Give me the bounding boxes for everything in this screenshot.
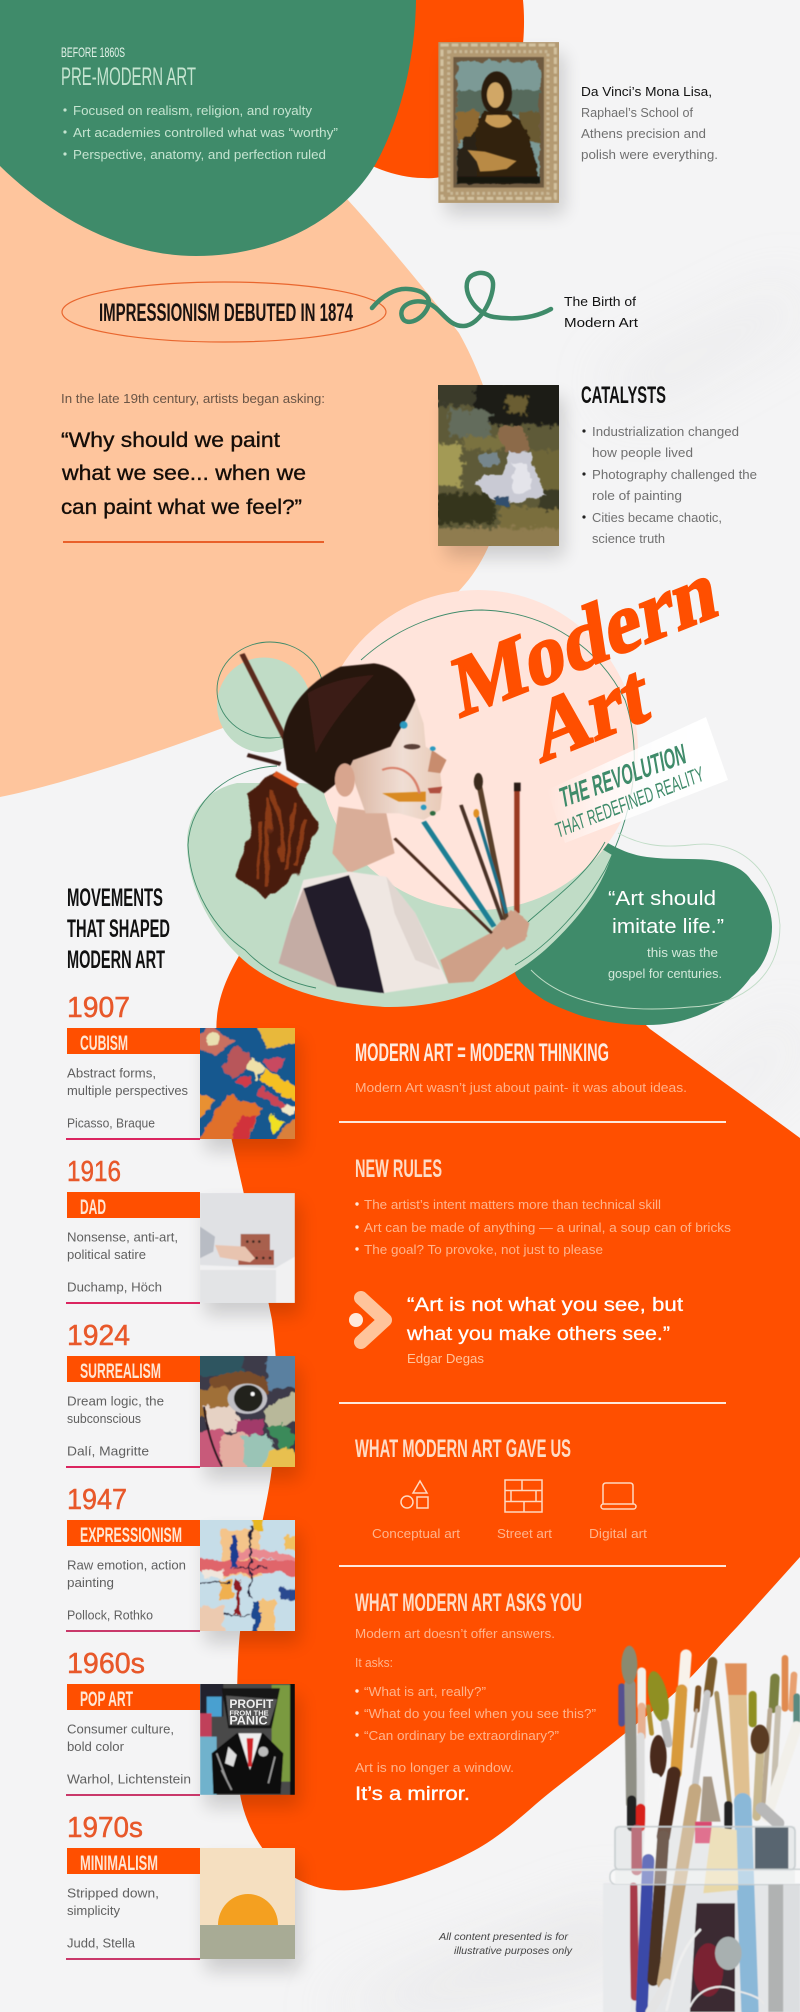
outline: quote blob	[531, 833, 780, 1009]
bullet list: catalysts: science truth	[592, 532, 665, 546]
quote: Edgar Degas: what you make others see.”	[406, 1323, 670, 1345]
timeline: 1907 cubism: multiple perspectives	[67, 1084, 188, 1098]
timeline: 1907 cubism: CUBISM	[80, 1032, 128, 1055]
text block: Da Vinci note: Raphael’s School of	[581, 106, 694, 120]
label: the birth of modern art	[564, 295, 639, 330]
callout: impressionism debuted in 1874	[62, 282, 386, 342]
label: the birth of modern art: Modern Art	[564, 316, 639, 330]
timeline: 1907 cubism: 1907	[67, 992, 130, 1024]
image: abstract expressionist painting	[200, 1520, 295, 1631]
body text: Art is no longer a window.	[355, 1761, 514, 1775]
icon: brick wall	[505, 1480, 542, 1512]
timeline: 1947 expressionism	[66, 1484, 300, 1643]
blob: big orange panel	[216, 940, 800, 1890]
timeline: 1916 dada: Duchamp, Höch	[67, 1280, 162, 1294]
body text: Modern art doesn’t offer answers.	[355, 1627, 555, 1641]
timeline: 1970s minimalism: 1970s	[67, 1812, 143, 1844]
body text: “What is art, really?”	[364, 1685, 486, 1699]
quote: why should we paint: what we see... when we	[61, 462, 306, 485]
panel: modern art = modern thinking	[355, 1039, 687, 1095]
blob: peach	[0, 160, 504, 797]
title: Modern Art: Art	[528, 643, 654, 782]
quote: art should imitate life: imitate life.”	[612, 916, 724, 938]
text block: Da Vinci note	[581, 85, 718, 162]
panel: catalysts	[581, 382, 757, 546]
bullet list: catalysts: role of painting	[592, 489, 682, 503]
blob: mint small	[217, 658, 311, 752]
paper shading	[320, 280, 800, 2012]
footnote: illustrative purposes only	[454, 1945, 573, 1957]
bullet list: catalysts: how people lived	[592, 446, 693, 460]
outline curves	[188, 610, 634, 988]
image: jar of paintbrushes	[603, 1646, 800, 2012]
callout: impressionism debuted in 1874: IMPRESSIONISM DEBUTED IN 1874	[99, 299, 353, 327]
timeline: 1924 surrealism: 1924	[67, 1320, 130, 1352]
bullet list: catalysts: Cities became chaotic,	[592, 511, 722, 525]
timeline: 1924 surrealism: Dream logic, the	[67, 1394, 164, 1408]
timeline: 1960s pop art: 1960s	[67, 1648, 145, 1680]
panel: what modern art asks you: WHAT MODERN ART ASKS YOU	[355, 1589, 582, 1617]
icon: arrow with dot	[349, 1298, 385, 1342]
timeline: 1947 expressionism: Raw emotion, action	[67, 1558, 186, 1572]
panel: what modern art gave us: WHAT MODERN ART GAVE US	[355, 1435, 571, 1463]
timeline: 1970s minimalism: Stripped down,	[67, 1886, 159, 1900]
bullet list: new rules	[355, 1198, 731, 1257]
heading: movements that shaped modern art: THAT SHAPED	[67, 915, 170, 943]
blob: mint large	[187, 783, 612, 1007]
footnote	[438, 1931, 573, 1957]
title ribbon	[547, 717, 728, 843]
icon labels	[372, 1527, 648, 1541]
photo: woman with paintbrushes	[237, 654, 529, 993]
panel: what modern art asks you	[355, 1589, 596, 1805]
timeline: 1907 cubism: Picasso, Braque	[67, 1116, 155, 1130]
bullet list: new rules: Art can be made of anything — a urinal, a soup can of bricks	[364, 1221, 731, 1235]
timeline: 1924 surrealism: subconscious	[67, 1412, 141, 1426]
timeline: 1960s pop art	[66, 1648, 300, 1807]
timeline: 1960s pop art: POP ART	[80, 1688, 133, 1711]
bullet list: pre-modern traits: Focused on realism, religion, and royalty	[73, 104, 313, 118]
blob: pink circle	[318, 590, 638, 910]
timeline: 1970s minimalism: MINIMALISM	[80, 1852, 158, 1875]
timeline: 1916 dada: 1916	[67, 1156, 121, 1188]
quote: art should imitate life: gospel for centuries.	[608, 967, 722, 981]
panel: new rules: NEW RULES	[355, 1155, 442, 1183]
timeline: 1960s pop art: Warhol, Lichtenstein	[67, 1772, 191, 1786]
image: profit from the panic street art: FROM THE	[229, 1708, 269, 1717]
icon labels: Street art	[497, 1527, 553, 1541]
body text	[355, 1627, 596, 1775]
title: Modern Art: Modern	[448, 539, 722, 737]
bullet list: pre-modern traits	[63, 104, 338, 162]
panel: new rules	[355, 1155, 731, 1257]
squiggle arrow	[372, 273, 551, 326]
timeline: 1947 expressionism: painting	[67, 1576, 114, 1590]
quote: Edgar Degas: Edgar Degas	[407, 1352, 484, 1366]
timeline: 1916 dada: political satire	[67, 1248, 146, 1262]
icon labels: Digital art	[589, 1527, 648, 1541]
bullet list: catalysts: Industrialization changed	[592, 425, 739, 439]
punchline: it's a mirror: It’s a mirror.	[355, 1783, 470, 1805]
timeline: 1970s minimalism: Judd, Stella	[67, 1936, 135, 1950]
panel: pre-modern art	[61, 44, 338, 162]
image: framed Mona Lisa	[438, 42, 564, 214]
body text: “Can ordinary be extraordinary?”	[364, 1729, 559, 1743]
heading: catalysts: CATALYSTS	[581, 382, 666, 409]
timeline: 1970s minimalism	[66, 1812, 300, 1971]
timeline: 1960s pop art: Consumer culture,	[67, 1722, 174, 1736]
timeline: 1947 expressionism: EXPRESSIONISM	[80, 1524, 182, 1547]
timeline: 1907 cubism	[66, 992, 300, 1151]
bullet list: catalysts: Photography challenged the	[592, 468, 757, 482]
heading: movements that shaped modern art	[67, 884, 170, 974]
timeline: 1916 dada: Nonsense, anti-art,	[67, 1230, 178, 1244]
quote: Edgar Degas	[406, 1294, 684, 1366]
icon: laptop	[601, 1483, 636, 1509]
body text: “What do you feel when you see this?”	[364, 1707, 596, 1721]
heading: movements that shaped modern art: MOVEMENTS	[67, 884, 163, 912]
timeline: 1916 dada: DAD	[80, 1196, 106, 1219]
bullet list: new rules: The goal? To provoke, not just to please	[364, 1243, 603, 1257]
quote: art should imitate life: this was the	[647, 946, 718, 960]
bullet list: catalysts	[582, 425, 757, 546]
bullet list: pre-modern traits: Perspective, anatomy, and perfection ruled	[73, 148, 326, 162]
quote: art should imitate life	[608, 888, 724, 981]
heading: pre-modern art: PRE-MODERN ART	[61, 63, 196, 91]
image: impressionist painting of girl	[435, 382, 564, 557]
quote: art should imitate life: “Art should	[608, 888, 716, 910]
body text: It asks:	[355, 1656, 393, 1670]
text block: Da Vinci note: polish were everything.	[581, 148, 718, 162]
quote: why should we paint: can paint what we feel?”	[61, 496, 302, 519]
eyebrow: before 1860s: BEFORE 1860S	[61, 44, 125, 60]
label: the birth of modern art: The Birth of	[564, 295, 637, 309]
timeline: 1947 expressionism: Pollock, Rothko	[67, 1608, 153, 1622]
timeline: 1960s pop art: bold color	[67, 1740, 124, 1754]
timeline: 1970s minimalism: simplicity	[67, 1904, 121, 1918]
image: cubist painting	[200, 1028, 295, 1139]
timeline: 1947 expressionism: 1947	[67, 1484, 127, 1516]
bullet list: new rules: The artist’s intent matters more than technical skill	[364, 1198, 661, 1212]
image: minimalist sun	[200, 1848, 295, 1959]
text block: Da Vinci note: Athens precision and	[581, 127, 706, 141]
icon labels: Conceptual art	[372, 1527, 461, 1541]
underline	[63, 541, 324, 543]
timeline: 1924 surrealism: Dalí, Magritte	[67, 1444, 149, 1458]
blob: top orange	[370, 0, 524, 178]
panel: what modern art gave us	[355, 1435, 648, 1541]
intro line: In the late 19th century, artists began asking:	[61, 392, 325, 406]
footnote: All content presented is for	[438, 1931, 569, 1943]
quote: Edgar Degas: “Art is not what you see, but	[407, 1294, 684, 1316]
bullet list: pre-modern traits: Art academies controlled what was “worthy”	[73, 126, 338, 140]
quote: why should we paint: “Why should we paint	[61, 429, 280, 452]
image: bricks on plinth	[200, 1193, 295, 1303]
text block: Da Vinci note: Da Vinci’s Mona Lisa,	[581, 85, 712, 99]
quote: why should we paint	[61, 429, 306, 519]
timeline: 1916 dada	[66, 1156, 300, 1315]
icon: shapes	[401, 1481, 428, 1508]
image: profit from the panic street art: PANIC	[229, 1714, 268, 1728]
timeline: 1907 cubism: Abstract forms,	[67, 1066, 156, 1080]
hero: artist portrait and title	[187, 539, 780, 1025]
timeline: 1924 surrealism	[66, 1320, 300, 1479]
image: profit from the panic street art: PROFIT	[229, 1697, 274, 1711]
panel: modern art = modern thinking: Modern Art wasn’t just about paint- it was about ideas.	[355, 1081, 687, 1095]
blob: top green	[0, 0, 416, 256]
heading: movements that shaped modern art: MODERN ART	[67, 946, 165, 974]
subtitle: the revolution: THE REVOLUTION	[557, 737, 688, 814]
timeline: 1924 surrealism: SURREALISM	[80, 1360, 161, 1383]
panel: artists' question	[61, 392, 325, 543]
panel: modern art = modern thinking: MODERN ART = MODERN THINKING	[355, 1039, 609, 1067]
blob: quote green	[515, 842, 772, 1025]
image: painted eye mural	[200, 1356, 295, 1467]
image: profit from the panic street art	[200, 1683, 295, 1795]
